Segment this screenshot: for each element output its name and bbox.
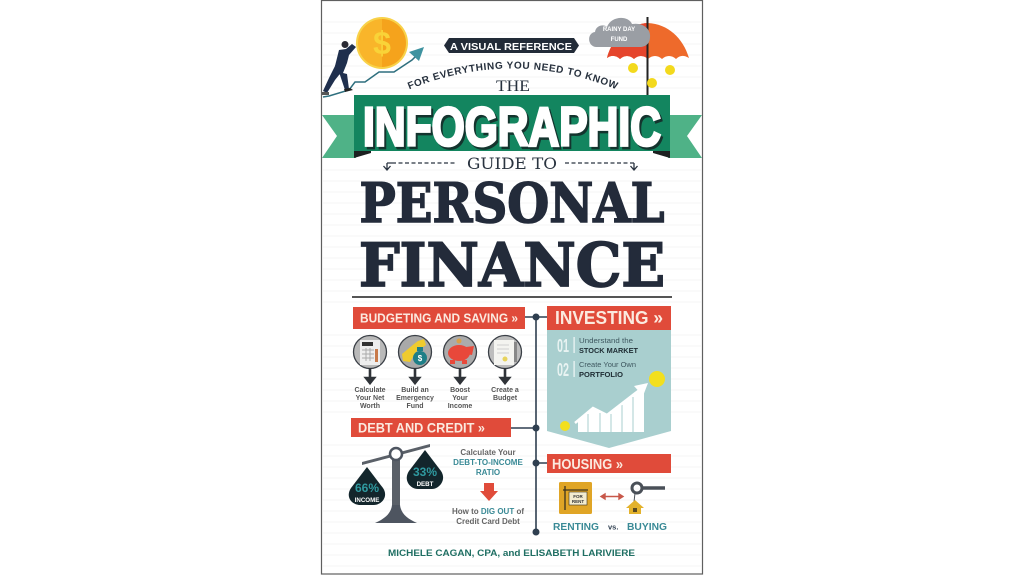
weight: 33% debt: DEBT	[417, 481, 434, 488]
book cover	[322, 0, 702, 574]
panel: budgeting and saving	[353, 307, 525, 410]
label: calculate your net worth: Calculate	[354, 387, 386, 394]
list item 01: Understand the	[579, 336, 633, 345]
label: renting: RENTING	[553, 522, 599, 533]
list item 02: PORTFOLIO	[579, 370, 623, 379]
icon: money bag: $	[418, 354, 423, 363]
arrow: down	[480, 483, 498, 501]
icon: rising trend arrow	[323, 47, 424, 97]
weight: 66% income: 66%	[355, 481, 379, 495]
badge: a visual reference: A VISUAL REFERENCE	[450, 41, 572, 53]
weight: 33% debt: 33%	[413, 465, 437, 479]
heading: debt and credit: DEBT AND CREDIT »	[358, 420, 485, 436]
icon: gold dollar coin: $	[373, 25, 391, 61]
label: calculate your net worth: Worth	[360, 403, 380, 410]
icon: budget document	[488, 336, 522, 383]
heading: finance: FINANCE	[359, 231, 665, 301]
icon: calculator	[354, 336, 386, 383]
icon: rainy day cloud	[589, 18, 650, 47]
list item 02: 02	[557, 360, 569, 380]
label: buying: BUYING	[627, 522, 667, 533]
heading: infographic: INFOGRAPHIC	[365, 98, 663, 160]
arrow: double headed	[601, 494, 623, 499]
teal shield	[547, 330, 671, 448]
text: debt-to-income ratio: Calculate Your	[460, 448, 516, 457]
icon: key and house	[626, 483, 665, 514]
divider rule	[352, 296, 672, 298]
heading: personal: PERSONAL	[360, 171, 664, 235]
text: debt-to-income ratio: RATIO	[476, 468, 500, 477]
label: create a budget: Create a	[491, 387, 519, 394]
icon: for rent sign: RENT	[572, 499, 584, 504]
heading: infographic: INFOGRAPHIC	[363, 96, 661, 158]
chart: rising bars and arrow	[560, 371, 665, 432]
heading: the: THE	[496, 78, 530, 95]
text: dig out of credit card debt: How to DIG OUT of	[452, 507, 524, 516]
text: dig out of credit card debt: Credit Card Debt	[456, 517, 520, 526]
text: dig out of credit card debt	[452, 507, 524, 526]
arched subtitle: FOR EVERYTHING YOU NEED TO KNOW	[407, 62, 619, 90]
label: boost your income: Boost	[450, 387, 471, 394]
label: vs: vs.	[608, 522, 618, 532]
list item 02	[557, 360, 636, 380]
list item 02: Create Your Own	[579, 360, 636, 369]
ribbon banner	[322, 95, 702, 160]
icon: rainy day cloud: RAINY DAY	[603, 27, 635, 33]
label: boost your income: Income	[448, 403, 472, 410]
heading: budgeting and saving	[353, 307, 525, 329]
text: debt-to-income ratio	[453, 448, 523, 477]
badge: a visual reference	[444, 38, 579, 53]
text: debt-to-income ratio: DEBT-TO-INCOME	[453, 458, 523, 467]
panel: investing	[547, 306, 671, 448]
label: create a budget: Budget	[493, 395, 518, 402]
weight: 66% income	[349, 467, 385, 505]
panel: housing	[547, 454, 671, 533]
label: boost your income: Your	[452, 395, 468, 402]
list item 01: STOCK MARKET	[579, 346, 639, 355]
weight: 33% debt	[407, 450, 443, 489]
icon: piggy bank	[444, 336, 476, 383]
heading: guide to: GUIDE TO	[467, 154, 557, 173]
author line: MICHELE CAGAN, CPA, and ELISABETH LARIVIERE	[388, 548, 635, 559]
icon: balance scale	[349, 444, 443, 523]
label: build an emergency fund: Build an	[401, 387, 429, 394]
icon: climbing man pushing coin	[322, 17, 424, 97]
label: calculate your net worth: Your Net	[356, 395, 385, 402]
panel: debt and credit	[349, 418, 524, 526]
heading: guide to	[384, 154, 638, 173]
icon: for rent sign: FOR	[573, 494, 583, 499]
icon: rainy day cloud: FUND	[611, 37, 628, 43]
weight: 66% income: INCOME	[355, 497, 379, 504]
label: build an emergency fund: Fund	[406, 403, 424, 410]
icon: umbrella with cloud and coins	[589, 17, 689, 95]
label: build an emergency fund: Emergency	[396, 395, 434, 402]
heading: housing: HOUSING »	[552, 457, 623, 473]
heading: budgeting and saving: BUDGETING AND SAVING »	[360, 310, 518, 326]
icon: for rent sign	[559, 482, 592, 514]
timeline connector	[511, 314, 547, 536]
list item 01	[557, 336, 639, 356]
icon: man	[322, 41, 356, 95]
list item 01: 01	[557, 336, 569, 356]
icon: money bag	[398, 336, 432, 383]
heading: investing: INVESTING »	[555, 308, 663, 328]
